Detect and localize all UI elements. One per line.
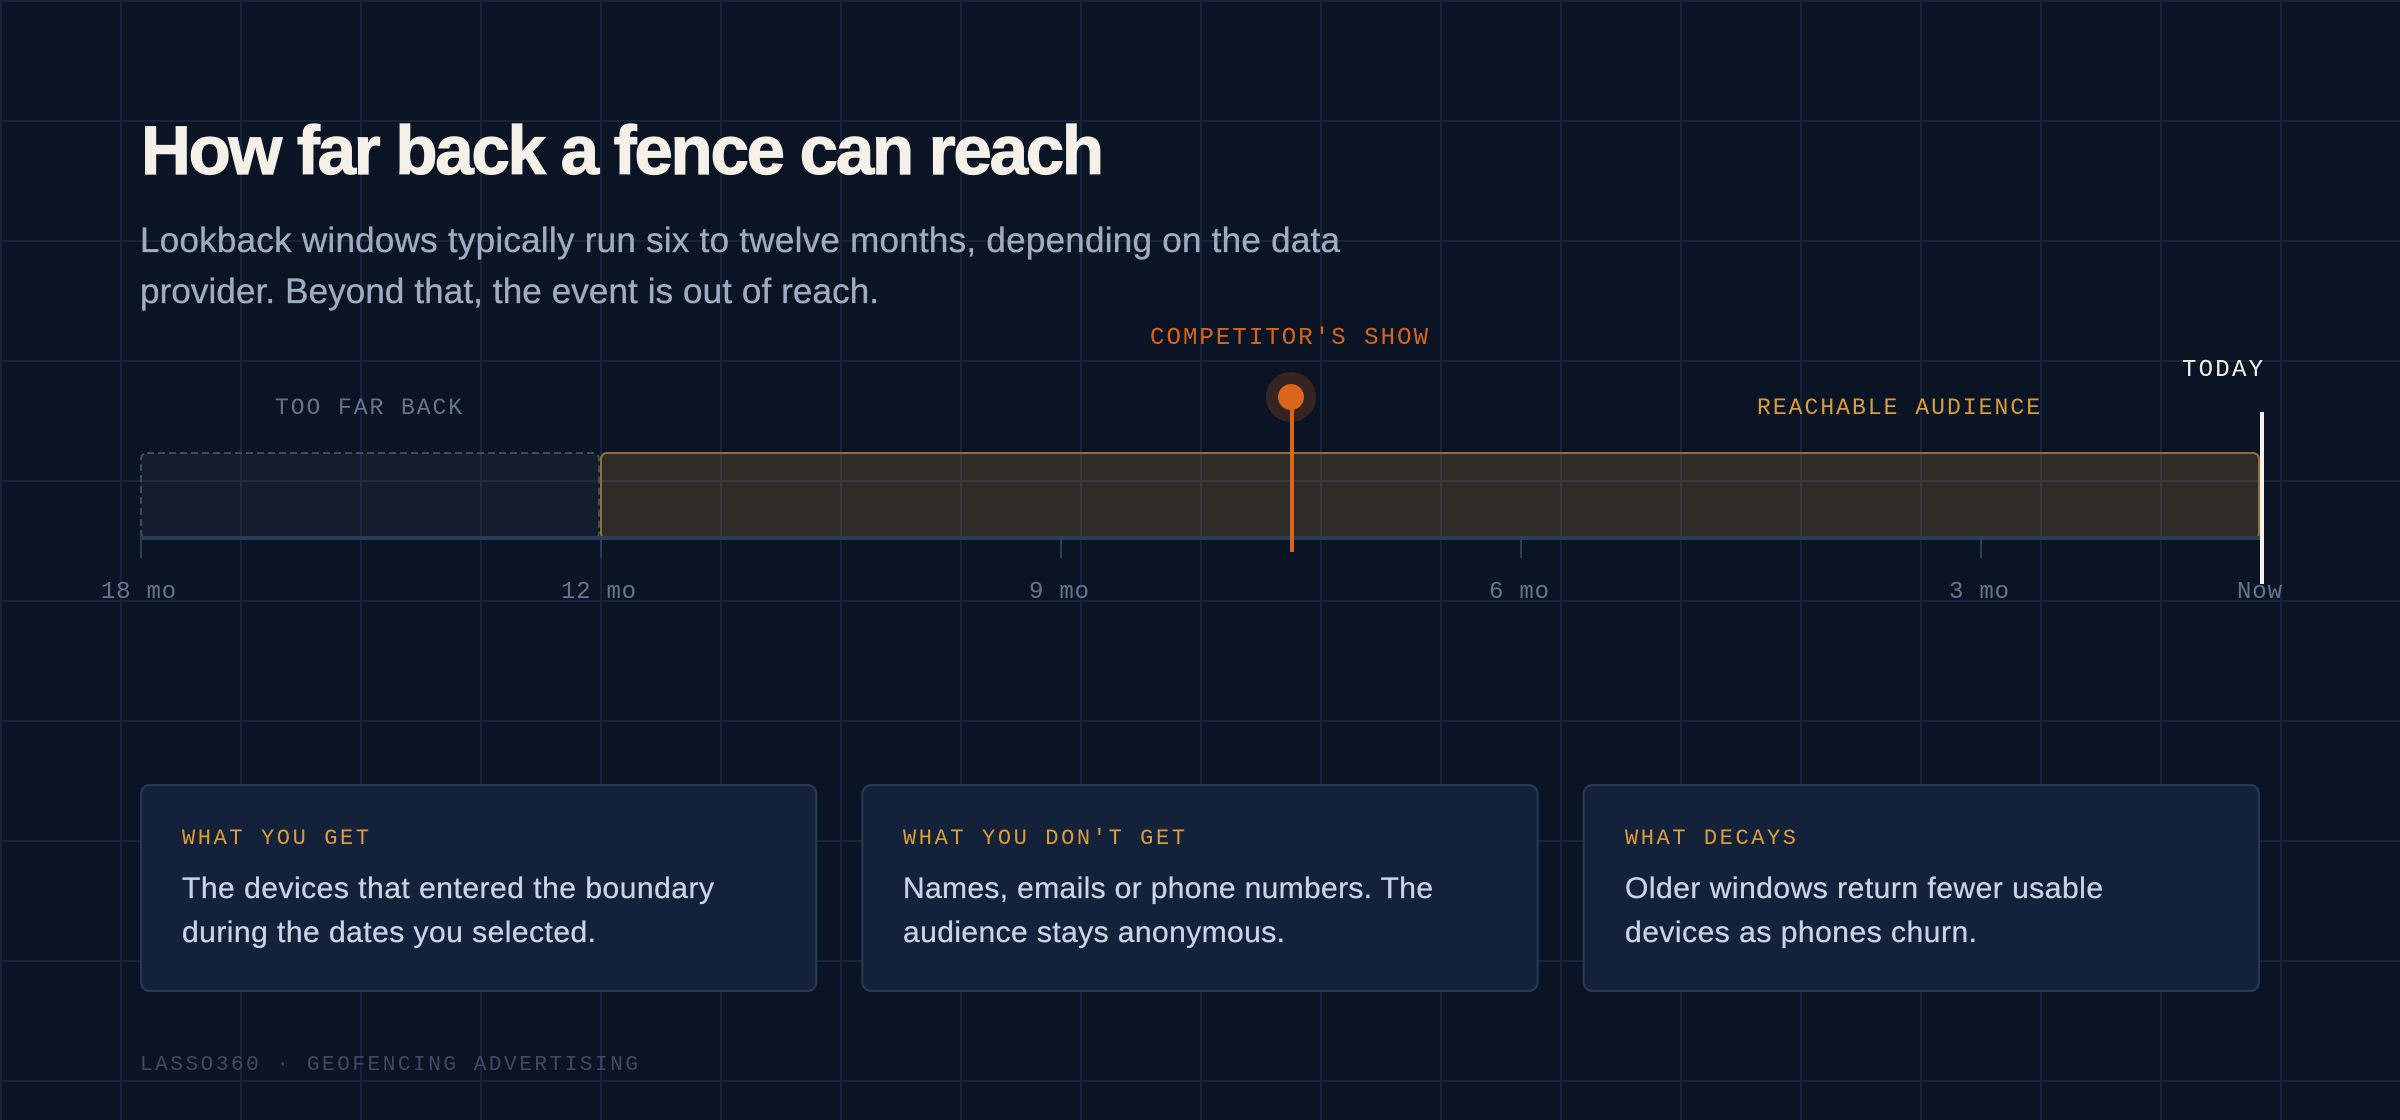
panel: what decays (1584, 785, 2259, 991)
card body: Names, emails or phone numbers. The (903, 872, 1433, 905)
axis baseline (140, 536, 2260, 540)
axis labels: 3 mo (1949, 579, 2009, 606)
axis ticks (140, 540, 1982, 558)
label: reachable audience: REACHABLE AUDIENCE (1757, 395, 2040, 421)
card body (903, 872, 1433, 949)
card body (182, 872, 714, 949)
card heading: WHAT DECAYS (1625, 826, 1796, 851)
subtitle: Lookback windows typically run six to twelve months, depending on the data (140, 221, 1341, 260)
axis labels (101, 579, 2283, 606)
card heading: WHAT YOU GET (182, 826, 369, 851)
too far back zone (141, 453, 599, 539)
card body: audience stays anonymous. (903, 916, 1285, 949)
label: too far back: TOO FAR BACK (275, 395, 462, 421)
axis labels: Now (2237, 579, 2283, 606)
subtitle (140, 221, 1341, 311)
event marker: competitor's show: COMPETITOR'S SHOW (1150, 325, 1429, 352)
today marker (2182, 357, 2264, 584)
axis labels: 9 mo (1029, 579, 1089, 606)
title: How far back a fence can reach (141, 112, 1104, 189)
timeline chart (101, 325, 2283, 606)
today marker: TODAY (2182, 357, 2263, 384)
event marker: competitor's show (1150, 325, 1429, 552)
footer: LASSO360 · GEOFENCING ADVERTISING (140, 1054, 638, 1077)
card heading: WHAT YOU DON'T GET (903, 826, 1185, 851)
card body: Older windows return fewer usable (1625, 872, 2103, 905)
axis labels: 18 mo (101, 579, 176, 606)
axis labels: 6 mo (1489, 579, 1549, 606)
panel: what you get (141, 785, 816, 991)
card body: during the dates you selected. (182, 916, 596, 949)
subtitle: provider. Beyond that, the event is out of reach. (140, 272, 879, 311)
axis labels: 12 mo (561, 579, 636, 606)
card body: The devices that entered the boundary (182, 872, 714, 905)
card body: devices as phones churn. (1625, 916, 1977, 949)
reachable zone (601, 453, 2259, 539)
card body (1625, 872, 2103, 949)
panel: what you don't get (862, 785, 1538, 991)
